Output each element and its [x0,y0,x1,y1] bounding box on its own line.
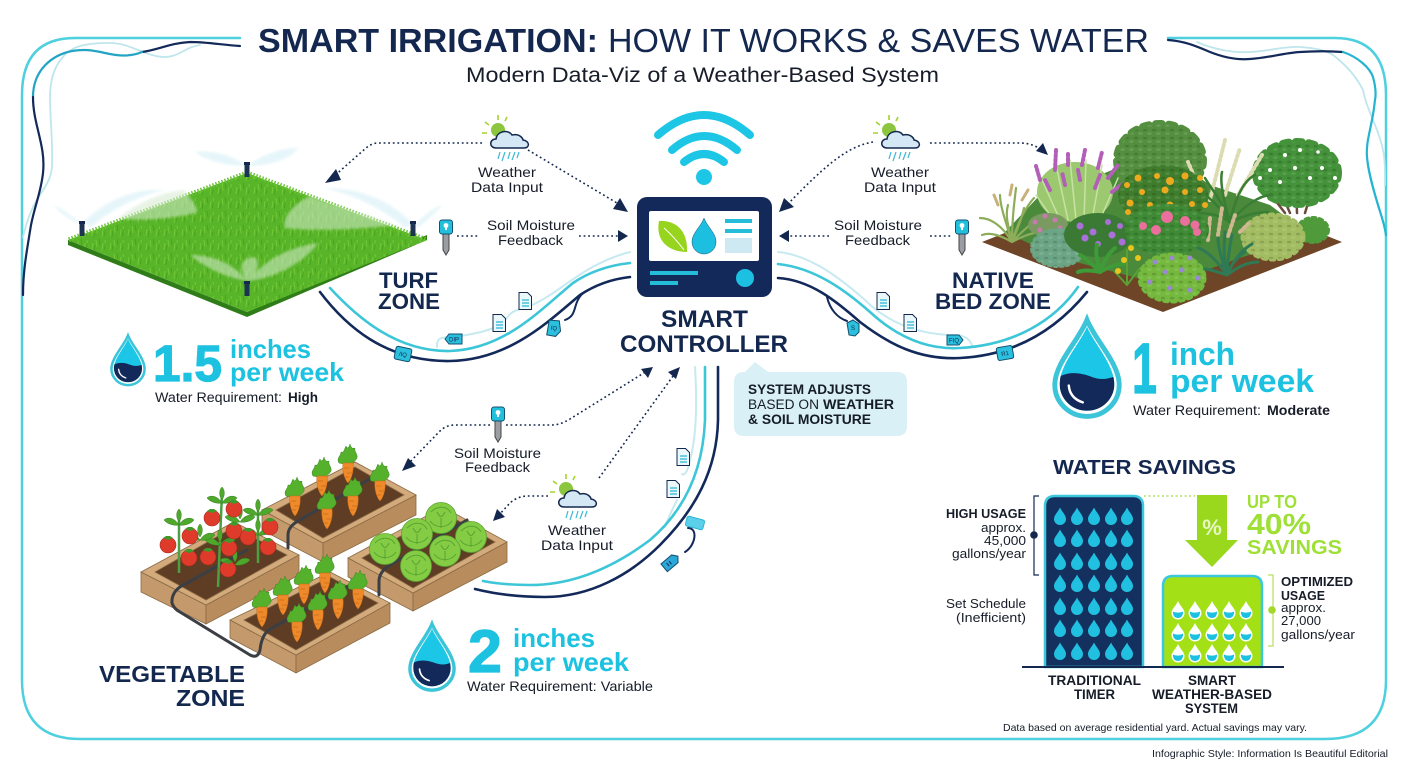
bar: traditional timer [1045,496,1143,667]
blue-green mound [1032,230,1084,266]
dark spiky plant [1196,232,1258,275]
high usage annotation [946,496,1039,575]
native bed stat: per week [1170,363,1314,399]
savings arrow: % [1202,515,1222,540]
savings callout text: UP TO [1247,492,1297,512]
savings callout text [1247,492,1342,559]
pampas [1208,208,1250,240]
sprays behind lawn [54,148,442,228]
turf stat [111,334,345,405]
pink flowers [1125,204,1209,256]
drip hose linking beds [172,583,350,656]
soil label: turf: Soil Moisture [487,217,575,233]
callout: SYSTEM ADJUSTS [748,382,871,397]
callout [734,362,907,436]
turf zone label: TURF [379,268,438,293]
vegetable stat: Water Requirement: Variable [467,678,653,694]
turf stat: High [288,390,318,405]
data tags and documents on lines: S [851,326,855,332]
title: HOW IT WORKS & SAVES WATER [608,22,1149,59]
data tags and documents on lines: R1 [1001,351,1010,358]
purple dot bush [1140,255,1204,301]
tomato plants [160,487,278,587]
controller label: CONTROLLER [620,331,788,358]
soil label: turf [440,217,575,255]
native bed stat: 1 [1132,330,1157,409]
lavender [1036,150,1125,222]
water savings heading: WATER SAVINGS [1053,457,1236,479]
bar label: smart system: SYSTEM [1185,701,1238,716]
optimized usage annotation: OPTIMIZED [1281,574,1353,589]
tree [1256,142,1338,213]
data note: Data based on average residential yard. Actual savings may vary. [1003,722,1307,734]
wifi icon [658,115,750,185]
high usage annotation: approx. [981,520,1026,535]
tall plumes [1188,140,1262,200]
high usage annotation: 45,000 [984,533,1026,548]
weather label: vegetable: Weather [548,522,606,538]
title: SMART IRRIGATION: [258,22,598,59]
turf zone label: ZONE [378,289,440,314]
bar label: traditional timer: TIMER [1074,687,1115,702]
big dark bush [1117,124,1203,196]
callout: BASED ON [748,397,819,412]
subtitle: Modern Data-Viz of a Weather-Based System [466,64,939,87]
callout: & SOIL MOISTURE [748,412,871,427]
ornamental grass [980,188,1045,242]
savings callout text: 40% [1247,509,1311,541]
yellow flowers [1118,165,1208,225]
optimized usage annotation: approx. [1281,600,1326,615]
weather label: native bed: Data Input [864,179,936,195]
turf stat: Water Requirement: [155,390,282,405]
set schedule note [946,596,1026,625]
bar: smart system [1163,576,1262,667]
native bed stat [1055,320,1330,418]
turf zone lawn illustration [54,148,442,317]
vegetable stat: 2 [468,618,502,685]
bar label: smart system: WEATHER-BASED [1152,687,1272,702]
bar label: smart system [1152,673,1272,716]
bar label: traditional timer [1048,673,1141,702]
bar label: traditional timer: TRADITIONAL [1048,673,1141,688]
optimized usage annotation [1268,574,1356,646]
vegetable stat [410,618,653,694]
vegetable zone label: ZONE [176,685,245,711]
turf zone label [378,268,440,314]
raised bed: tomatoes [141,522,299,624]
icon: leaf [658,221,687,252]
soil label: native bed: Feedback [845,232,911,248]
vegetable stat: per week [513,647,630,677]
data tags and documents on lines: FIQ [949,338,959,344]
icon: water drop [692,218,716,254]
raised bed: top carrots [262,462,416,562]
weather label: turf: Data Input [471,179,543,195]
smart controller device [637,197,772,297]
translucent spray zones [118,190,395,281]
turf stat: per week [230,357,345,387]
high usage annotation: HIGH USAGE [946,506,1026,521]
soil label: turf: Feedback [498,232,564,248]
data tags and documents on lines: IQ [550,325,558,333]
small yellow flowers [1115,245,1141,285]
native bed stat: inch [1170,336,1235,372]
native bed stat: Water Requirement: [1133,402,1261,418]
mauve patch [1028,213,1068,237]
raised bed: bottom carrots [230,572,390,673]
callout: WEATHER [823,397,894,412]
soil label: vegetable: Soil Moisture [454,445,541,461]
weather label: turf [471,115,543,195]
data tags and documents on lines [394,292,1014,572]
bar label: smart system: SMART [1188,673,1237,688]
optimized usage annotation: USAGE [1281,588,1325,603]
pale bush [1243,215,1303,259]
native bed illustration [980,124,1342,312]
native bed stat: Moderate [1267,402,1330,418]
data tags and documents on lines: /IQ [398,352,408,359]
savings arrow [1185,495,1238,567]
native bed label [935,268,1051,314]
native bed label: NATIVE [952,268,1034,293]
dotted data-flow arrows [332,142,1042,516]
vegetable zone label: VEGETABLE [99,661,245,687]
weather label: vegetable [541,474,613,553]
water savings bar chart [1022,496,1284,667]
strappy plant [1190,172,1272,222]
raised bed: cabbage [348,507,507,611]
controller label [620,306,788,358]
title [258,22,1149,59]
weather label: native bed: Weather [871,164,929,180]
irrigation lines from controller to zones [320,252,1087,597]
optimized usage annotation: gallons/year [1281,627,1356,642]
weather label: turf: Weather [478,164,536,180]
set schedule note: Set Schedule [946,596,1026,611]
vegetable stat: inches [513,623,595,653]
vegetable zone illustration [141,444,507,673]
arrowheads [325,143,1048,521]
weather label: vegetable: Data Input [541,537,613,553]
weather label: native bed [864,115,936,195]
purple flowers [1064,213,1132,257]
controller label: SMART [661,306,748,333]
soil label: native bed [834,217,968,255]
savings callout text: SAVINGS [1247,537,1342,559]
soil label: vegetable [454,407,541,475]
set schedule note: (Inefficient) [956,610,1026,625]
high usage annotation: gallons/year [952,546,1027,561]
data tags and documents on lines: DIP [449,338,459,344]
small shrub [1298,218,1328,242]
turf stat: 1.5 [153,335,222,392]
fern [1078,245,1125,272]
soil label: native bed: Soil Moisture [834,217,922,233]
soil label: vegetable: Feedback [465,459,531,475]
vegetable zone label [99,661,245,711]
style credit: Infographic Style: Information Is Beautiful Editorial [1152,748,1388,760]
optimized usage annotation: 27,000 [1281,613,1321,628]
native bed label: BED ZONE [935,289,1051,314]
turf stat: inches [230,334,311,364]
